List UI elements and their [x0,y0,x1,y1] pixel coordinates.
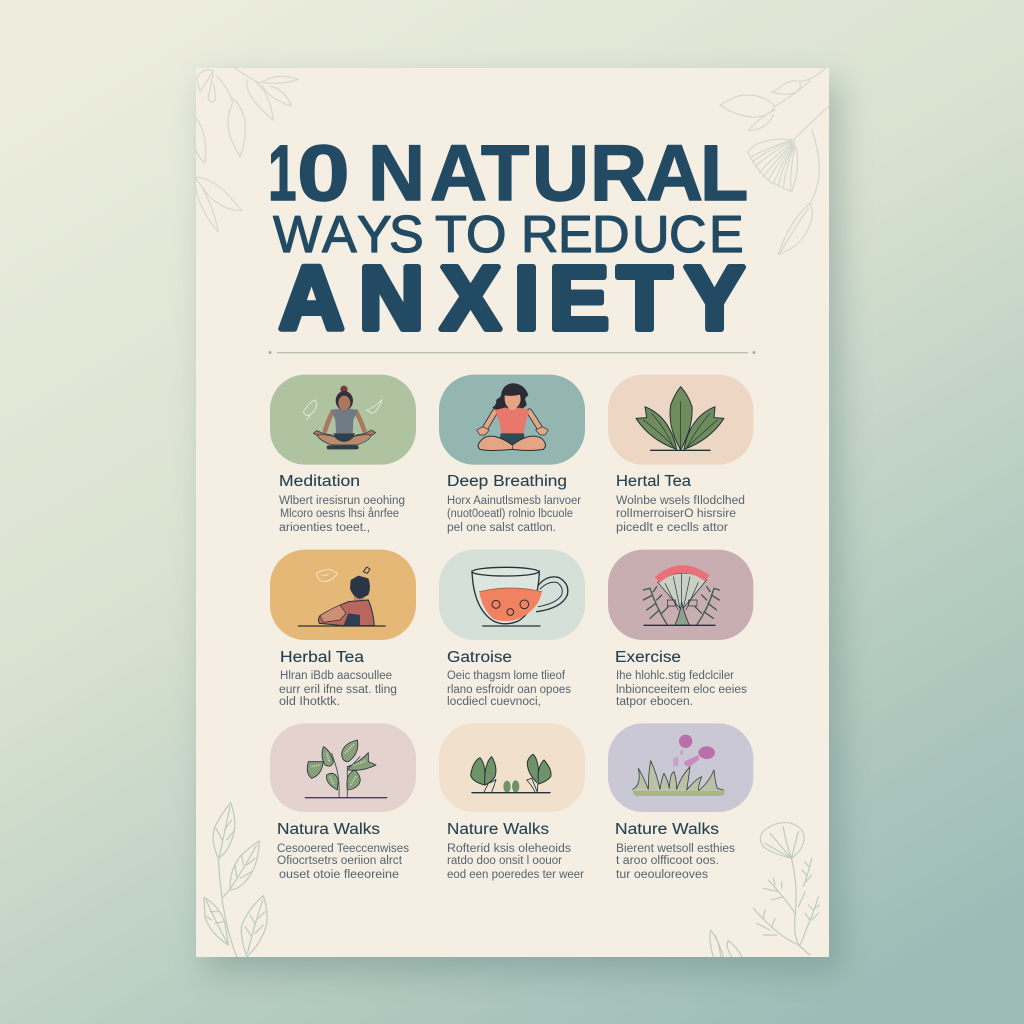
description: Hertal Tea: picedlt e ceclls attor [616,522,728,534]
description: Natura Walks: ouset otoie fleeoreine [279,869,399,881]
divider [268,351,756,354]
description: Herbal Tea: old Ihotktk. [279,696,340,708]
card: Herbal Tea leaf [608,375,753,534]
card: Nature Walks 2 [439,723,585,881]
description: Natura Walks [277,843,409,881]
description: Exercise: tatpor ebocen. [616,696,693,708]
card: Herbal Tea person [270,550,416,708]
icon panel: tea cup [439,550,585,640]
icon panel: grass and flowers [608,723,753,812]
description: Gatroise: locdiecl cuevnoci, [447,696,541,708]
icon panel: leafy plant [270,723,416,812]
decoration: bottom-right wildflower [710,823,819,957]
heading: Hertal Tea: Hertal Tea [616,473,691,490]
icon panel: meditation [270,375,416,465]
description: Gatroise: rlano esfroidr oan opoes [447,684,571,696]
description: Meditation [279,495,405,534]
poster shadow [206,82,840,972]
description: Deep Breathing: (nuot0oeatl) rolnio lbcuole [447,508,573,520]
card: Nature Walks 3 [608,723,753,881]
description: Nature Walks: tur oeouloreoves [616,869,708,881]
title [268,128,748,349]
description: Nature Walks: t aroo olfficoot oos. [616,855,719,867]
description: Herbal Tea: Hlran iBdb aacsoullee [280,670,392,682]
description: Exercise [616,670,747,708]
description: Hertal Tea: rolImerroiserO hisrsire [616,508,736,520]
description: Meditation: Mlcoro oesns lhsi ånrfee [280,508,399,520]
description: Nature Walks: Rofterid ksis oleheoids [447,843,571,855]
heading: Deep Breathing: Deep Breathing [447,473,567,490]
card: Meditation [270,375,416,534]
heading: Herbal Tea: Herbal Tea [280,649,364,666]
description: Exercise: lnbionceeitem eloc eeies [616,684,747,696]
title line 2: WAYS TO REDUCE [273,206,744,264]
description: Nature Walks: ratdo doo onsit l oouor [447,855,562,867]
description: Nature Walks [616,843,735,881]
icon panel: sprouts [439,723,585,812]
description: Meditation: Wlbert iresisrun oeohing [279,495,405,507]
description: Natura Walks: Cesooered Teeccenwises [277,843,409,855]
icon panel: leaves [608,375,753,465]
icon panel: deep breathing [439,375,585,465]
description: Herbal Tea [279,670,397,708]
heading: Gatroise: Gatroise [447,649,512,666]
icon panel: flower [608,550,753,640]
title line 1: 0 [297,129,350,217]
description: Deep Breathing [447,495,581,534]
decoration: bottom-left leaves [204,803,267,957]
heading: Meditation: Meditation [279,473,360,490]
card: Natura Walks [270,723,416,881]
description: Nature Walks [447,843,584,881]
description: Gatroise: Oeic thagsm lome tlieof [447,670,566,682]
title line 1: NATURAL [368,128,748,217]
heading: Exercise: Exercise [615,649,681,666]
description: Hertal Tea: Wolnbe wsels fIlodclhed [616,495,745,507]
description: Nature Walks: Bierent wetsoll esthies [616,843,735,855]
description: Herbal Tea: eurr eril ifne ssat. tling [279,684,397,696]
description: Exercise: Ihe hlohlc.stig fedclciler [616,670,734,682]
heading: Natura Walks: Natura Walks [277,821,380,838]
card: Exercise [608,550,753,708]
panel: poster [196,68,829,957]
title line 3: ANXIETY [279,249,745,349]
description: Hertal Tea [616,495,745,534]
title line 1: 1 [268,130,297,218]
description: Meditation: arioenties toeet., [279,522,370,534]
card: Deep Breathing [439,375,585,534]
description: Gatroise [447,670,571,708]
heading: Nature Walks: Nature Walks [447,821,549,838]
description: Nature Walks: eod een poeredes ter weer [447,869,584,881]
icon panel: resting person [270,550,416,640]
description: Deep Breathing: Horx Aainutlsmesb lanvoer [447,495,581,507]
card: Gatroise [439,550,585,708]
decoration: top-right flower [720,67,830,254]
description: Natura Walks: Ofiocrtsetrs oeriion alrct [277,855,403,867]
description: Deep Breathing: pel one salst cattlon. [447,522,556,534]
decoration: top-left leaves [195,67,298,232]
heading: Nature Walks: Nature Walks [615,821,719,838]
